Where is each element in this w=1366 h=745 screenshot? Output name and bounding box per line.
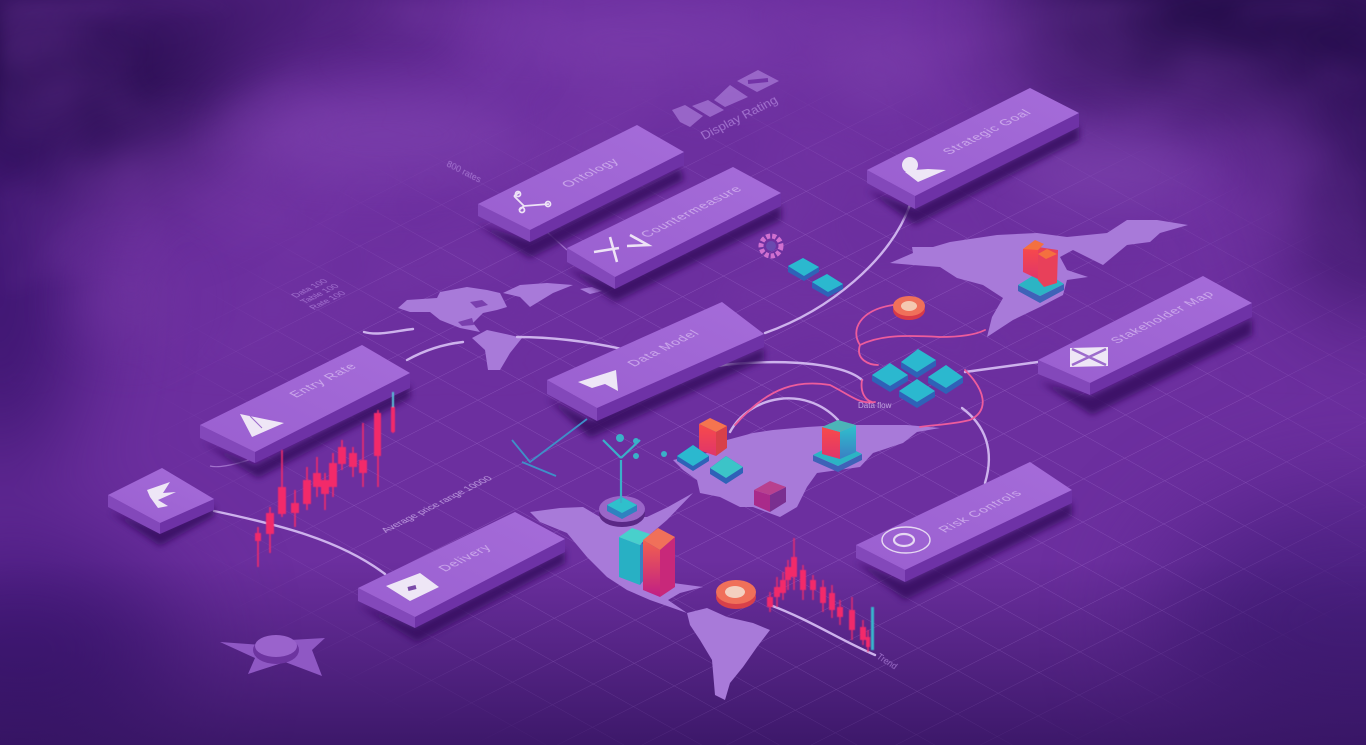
faded caption: centre right: Data flow: [858, 401, 892, 410]
panel label: Data Model: [624, 328, 703, 368]
map: lower left continent: [530, 493, 703, 613]
panel label: Entry Rate: [286, 361, 360, 399]
panel E: centre: [547, 302, 764, 438]
panel G: small left: [108, 468, 214, 546]
panel H: lower centre left: [358, 512, 565, 642]
faded caption: data table: Rate 100: [307, 290, 348, 311]
panel label: Risk Controls: [935, 488, 1026, 534]
faded caption: data table: Table 100: [298, 283, 341, 305]
map: upper right continent: [890, 220, 1188, 337]
faded caption: data table: Data 100: [289, 278, 330, 299]
icon: envelope: [1070, 347, 1108, 367]
map: centre continent: [673, 425, 940, 517]
panel I: lower right: [856, 462, 1072, 600]
panel label: Ontology: [558, 156, 623, 189]
icon: paper plane: [578, 370, 618, 391]
faded caption: data table: [289, 278, 348, 311]
teal antenna on round base: [599, 434, 667, 527]
centre red bar: [699, 418, 727, 456]
icon: white card: [386, 573, 439, 601]
red route lines: [735, 305, 985, 427]
panel C: top right: [867, 88, 1079, 225]
teal tiles near centre map: [677, 445, 743, 484]
red disc marker: lower: [716, 580, 756, 609]
teal tile cluster: [872, 349, 963, 408]
connector lines: [210, 205, 1038, 655]
icon: branching nodes: [514, 192, 550, 212]
top right red bars on teal base: [1018, 240, 1064, 303]
panel A: top centre left: [478, 125, 684, 258]
faded caption: centre left: Average price range 10000: [379, 475, 496, 534]
faded caption: upper left: 800 rates: [445, 159, 483, 185]
top faded icon row: [672, 70, 779, 127]
centre teal and red bars on base: [813, 420, 862, 472]
world maps: [398, 220, 1188, 700]
panel label: Delivery: [435, 542, 495, 573]
teal check mark lines: [512, 419, 587, 476]
panel D: right: [1038, 276, 1252, 415]
panel label: Stakeholder Map: [1107, 288, 1218, 345]
large bars: teal and magenta: [619, 528, 675, 597]
faded caption: top: Display Rating: [698, 93, 780, 142]
icon: circular badge: [882, 527, 930, 553]
panel B: top centre: [567, 167, 781, 302]
panel F: left: [200, 345, 410, 478]
icon: sigma glyph: [147, 482, 176, 508]
small teal tiles top: [788, 258, 843, 297]
isometric grid floor: [199, 110, 1366, 745]
panel label: Countermeasure: [637, 184, 746, 239]
icon: person stamp: [902, 157, 946, 182]
map: upper left continent: [398, 283, 602, 370]
icon: triangle sail: [240, 414, 284, 437]
candlestick chart: left: [255, 392, 395, 567]
icon: crossed strokes: [594, 235, 648, 262]
candlestick chart: right: [767, 538, 874, 652]
red disc marker: upper: [893, 296, 925, 320]
purple box: [754, 481, 786, 512]
faded caption: lower right: Trend: [875, 651, 900, 671]
map: south america: [687, 608, 770, 700]
panel label: Strategic Goal: [939, 107, 1035, 156]
star base icon bottom left: [220, 635, 325, 676]
gear icon: [761, 236, 781, 256]
